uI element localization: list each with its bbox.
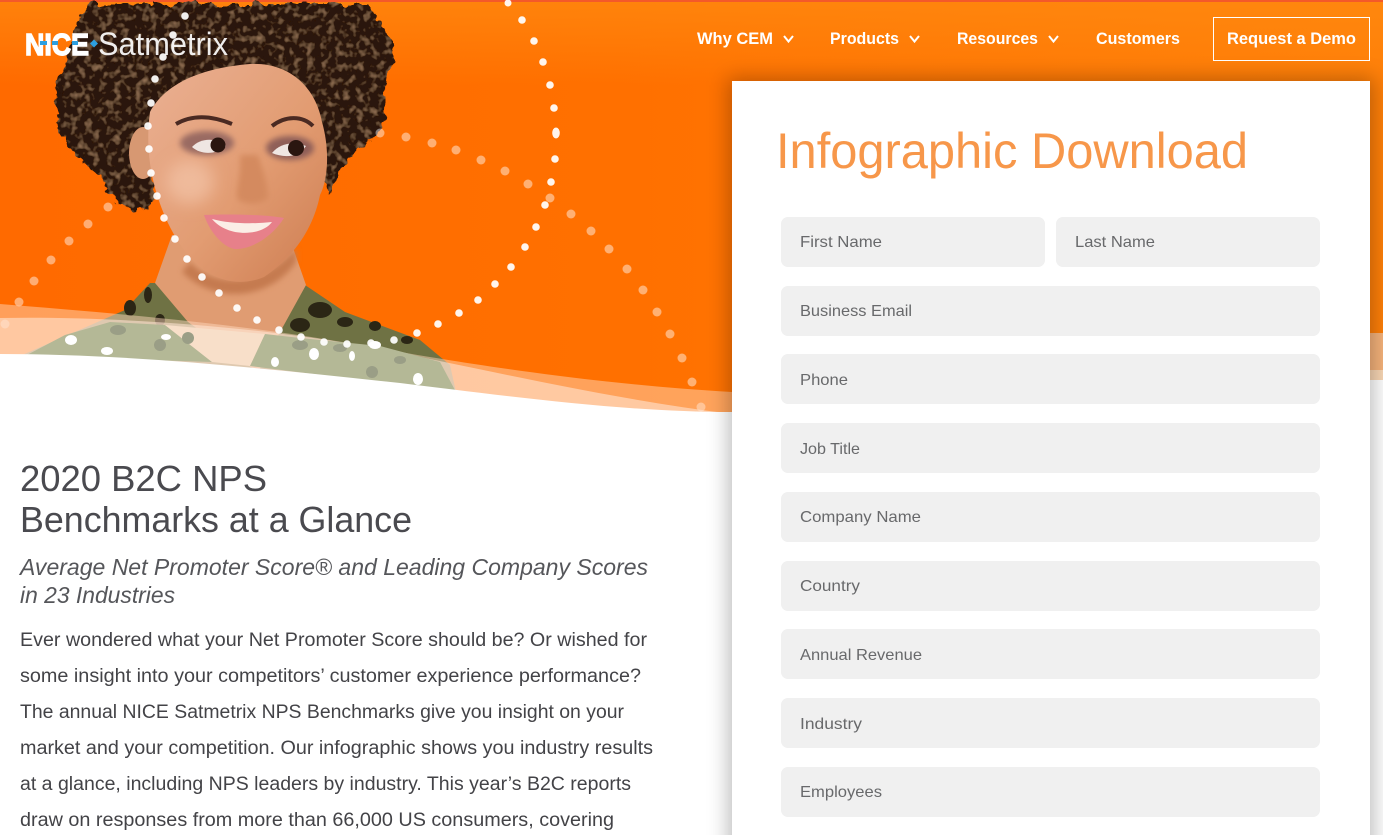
field: phone xyxy=(781,354,1320,404)
right edge band xyxy=(1368,333,1383,440)
field: employees: Employees xyxy=(800,784,882,801)
field: last name: Last Name xyxy=(1075,234,1155,251)
white page curve xyxy=(0,354,732,430)
mouth xyxy=(204,214,284,249)
request a demo button xyxy=(1214,18,1370,60)
intro paragraph: draw on responses from more than 66,000 US consumers, covering xyxy=(20,810,614,831)
intro paragraph: Ever wondered what your Net Promoter Score should be? Or wished for xyxy=(20,630,648,651)
cheek highlight xyxy=(166,160,214,204)
field: phone: Phone xyxy=(800,372,848,389)
field: job title: Job Title xyxy=(800,441,860,458)
hero banner xyxy=(0,0,1383,440)
field: country: Country xyxy=(800,578,860,595)
chevron xyxy=(784,36,793,42)
shirt under wave xyxy=(25,322,456,392)
nose xyxy=(237,155,268,204)
neck and chest xyxy=(155,235,306,372)
logo xyxy=(25,26,228,62)
field: first name: First Name xyxy=(800,234,882,251)
wave bands xyxy=(0,304,732,420)
navigation xyxy=(697,18,1370,60)
subheading xyxy=(18,554,648,608)
field: business email: Business Email xyxy=(800,303,912,320)
eyes xyxy=(176,117,314,160)
field: industry xyxy=(781,698,1320,748)
main heading: Benchmarks at a Glance xyxy=(20,499,412,540)
panel heading: Infographic Download xyxy=(776,123,1248,179)
navigation: Why CEM xyxy=(697,30,773,48)
field: first name xyxy=(781,217,1045,267)
navigation: Products xyxy=(830,30,899,48)
field: employees xyxy=(781,767,1320,817)
main heading: 2020 B2C NPS xyxy=(20,458,267,499)
field: company name: Company Name xyxy=(800,509,921,526)
subheading: in 23 Industries xyxy=(20,582,175,608)
field: annual revenue: Annual Revenue xyxy=(800,647,922,664)
logo: Satmetrix xyxy=(98,26,228,62)
ear xyxy=(129,127,157,179)
neck shadow xyxy=(182,248,296,294)
shirt xyxy=(20,283,456,392)
form panel xyxy=(728,78,1374,835)
hair xyxy=(56,4,395,211)
chevron xyxy=(910,36,919,42)
field: annual revenue xyxy=(781,629,1320,679)
field: job title xyxy=(781,423,1320,473)
field: last name xyxy=(1056,217,1320,267)
face xyxy=(148,64,327,282)
navigation: Resources xyxy=(957,30,1038,48)
logo: NICE xyxy=(25,27,89,62)
subheading: Average Net Promoter Score® and Leading Company Scores xyxy=(18,554,648,580)
intro paragraph: some insight into your competitors’ customer experience performance? xyxy=(20,666,641,687)
shirt dots xyxy=(124,287,413,344)
field: business email xyxy=(781,286,1320,336)
field: company name xyxy=(781,492,1320,542)
white dots xyxy=(144,0,560,348)
intro paragraph: market and your competition. Our infographic shows you industry results xyxy=(20,738,653,759)
field: country xyxy=(781,561,1320,611)
photo: smiling woman xyxy=(20,4,456,392)
intro paragraph: The annual NICE Satmetrix NPS Benchmarks give you insight on your xyxy=(20,702,625,723)
intro paragraph xyxy=(20,630,653,831)
navigation: Customers xyxy=(1096,30,1180,48)
main heading xyxy=(20,458,412,540)
field: industry: Industry xyxy=(800,716,862,733)
request a demo button: Request a Demo xyxy=(1227,30,1356,48)
chevron xyxy=(1049,36,1058,42)
intro paragraph: at a glance, including NPS leaders by industry. This year’s B2C reports xyxy=(20,774,631,795)
dotted paths xyxy=(0,128,706,412)
